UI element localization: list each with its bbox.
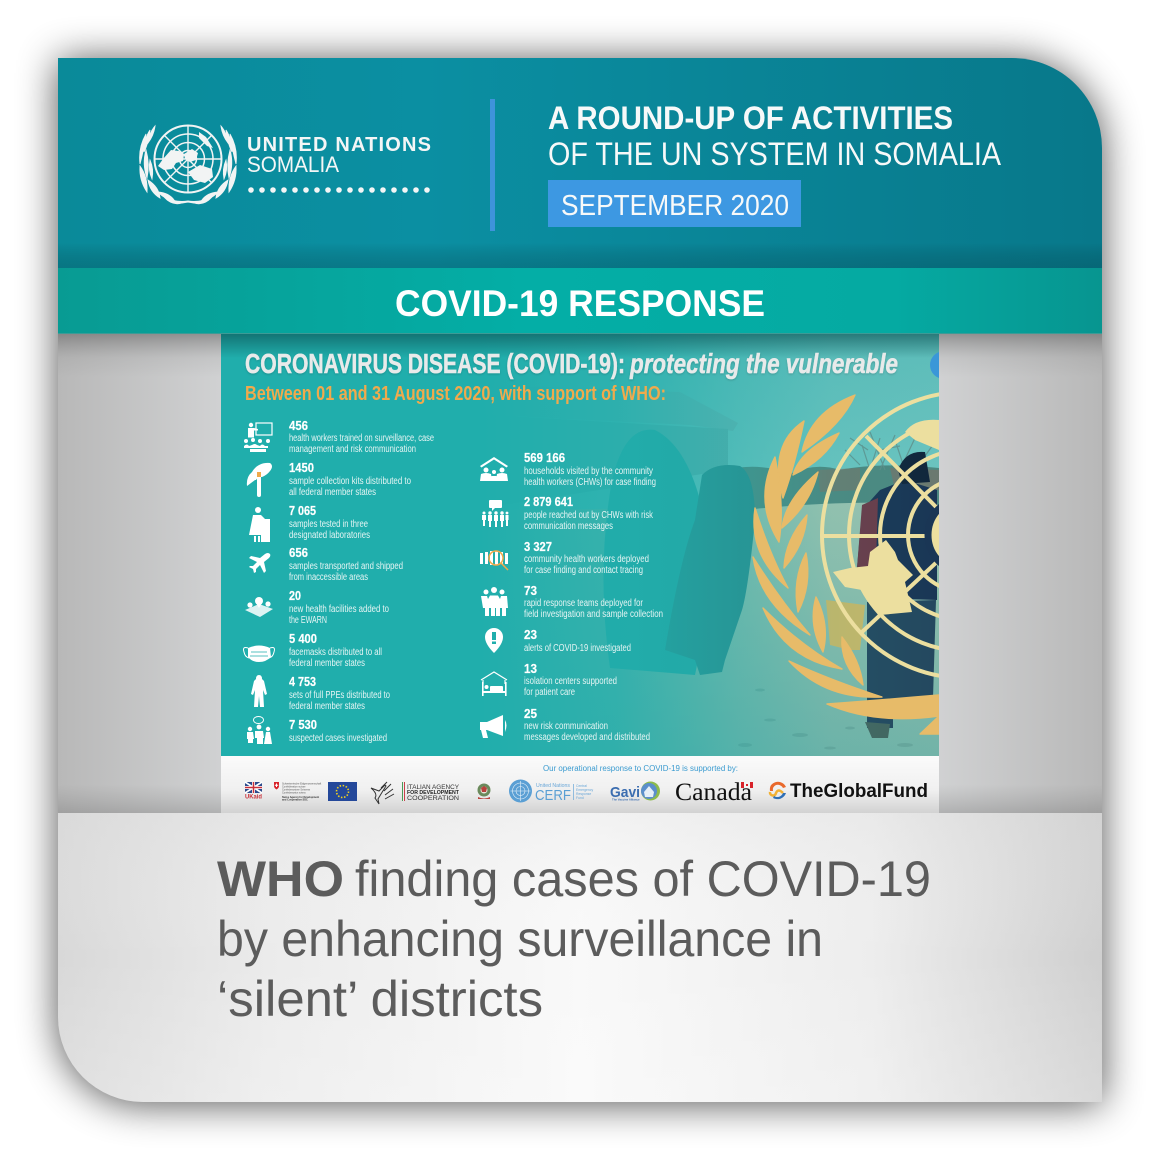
stat: 3 327: for case finding and contact tracing [524, 565, 643, 576]
stat: 4 753: sets of full PPEs distributed to [289, 690, 390, 701]
logo: Italian Agency: COOPERATION [407, 795, 459, 802]
panel: grey surround [58, 334, 1102, 813]
stat: 3 327 [480, 540, 649, 576]
stat: 456: management and risk communication [289, 444, 416, 455]
man in WHO vest [857, 452, 937, 738]
stat: 569 166: health workers (CHWs) for case finding [524, 477, 656, 488]
logo: CERF: Emergency [576, 788, 593, 792]
logo: Swiss cooperation: Swiss Agency for Development [282, 796, 319, 799]
small UN logo top right [930, 352, 939, 378]
vertical divider [490, 99, 495, 231]
stats: left column [244, 419, 434, 744]
stat: 23 [485, 628, 631, 654]
stat: 73: 73 [524, 584, 537, 598]
poster title: protecting the vulnerable [629, 348, 898, 379]
stat: 13: 13 [524, 662, 537, 676]
stat: 2 879 641: 2 879 641 [524, 495, 573, 509]
stat: 13: isolation centers supported [524, 676, 617, 687]
stat: 73: field investigation and sample collection [524, 609, 663, 620]
stat: 569 166 [480, 451, 656, 488]
dotted rule [248, 187, 430, 193]
text: United Nations Somalia: UNITED NATIONS [247, 134, 431, 156]
stat: 1450: 1450 [289, 461, 314, 475]
stat: 73: rapid response teams deployed for [524, 598, 644, 609]
stat: 656 [249, 548, 403, 580]
logo: Swiss cooperation: and Cooperation SDC [282, 798, 308, 802]
logo: EU flag [328, 782, 357, 801]
panel: poster [221, 334, 939, 813]
panel: header [58, 58, 1102, 268]
stat: 13: for patient care [524, 687, 575, 698]
logo: Gavi: Gavi [610, 784, 640, 801]
stat: 5 400: facemasks distributed to all [289, 647, 382, 658]
stat: 7 530 [247, 716, 387, 744]
logo: Italian Agency: ITALIAN AGENCY [407, 784, 460, 791]
logo: UKaid [245, 782, 262, 800]
stat: 13 [481, 662, 617, 698]
logo: CERF: United Nations [536, 783, 571, 789]
logo: CERF: Central [576, 784, 587, 788]
stat: 7 530: suspected cases investigated [289, 733, 387, 744]
jerrycan [826, 600, 865, 650]
stat: 456: health workers trained on surveillance, case [289, 433, 434, 444]
stat: 3 327: community health workers deployed [524, 554, 649, 565]
logo: Swiss cooperation: Schweizerische Eidgenossenschaft [282, 782, 321, 786]
stat: 25: 25 [524, 707, 537, 721]
logo: UKaid: UKaid [245, 794, 262, 800]
stat: 3 327: 3 327 [524, 540, 552, 554]
logo: Italian emblem [478, 784, 490, 799]
heading: round-up [548, 106, 1001, 166]
stat: 1450 [247, 461, 411, 498]
UN globe overlay [820, 392, 939, 678]
ground speckle [738, 688, 913, 750]
logo: Gavi: The Vaccine Alliance [612, 798, 640, 802]
stat: 25: messages developed and distributed [524, 732, 650, 743]
stat: 7 065: samples tested in three [289, 519, 368, 530]
caption text: WHO [217, 851, 344, 907]
logo: Swiss cooperation: Confédération suisse [282, 786, 306, 788]
stat: 7 530: 7 530 [289, 718, 317, 732]
heading: round-up: A ROUND-UP OF ACTIVITIES [548, 100, 953, 136]
heading: round-up: OF THE UN SYSTEM IN SOMALIA [548, 136, 1002, 172]
stat: 656: 656 [289, 546, 308, 560]
wreath leaves [753, 395, 939, 734]
stat: 20: new health facilities added to [289, 604, 389, 615]
hut [730, 422, 737, 430]
stat: 569 166: 569 166 [524, 451, 565, 465]
partner logos strip [221, 756, 939, 813]
logo: Italian Agency: FOR DEVELOPMENT [407, 790, 460, 796]
caption text: ‘silent’ districts [217, 971, 543, 1027]
left fade overlay [221, 334, 865, 756]
stat: 2 879 641 [482, 495, 654, 532]
sparse tree [845, 432, 935, 470]
stat: 4 753: 4 753 [289, 675, 316, 689]
stat: 1450: sample collection kits distributed to [289, 476, 411, 487]
stat: 20: 20 [289, 589, 301, 603]
stat: 20 [245, 590, 389, 623]
logo: CERF [509, 780, 593, 804]
poster title: CORONAVIRUS DISEASE (COVID-19): [245, 348, 625, 379]
text: United Nations Somalia [248, 137, 430, 172]
text: United Nations Somalia: SOMALIA [247, 152, 339, 177]
supporter line: Our operational response to COVID-19 is supported by: [543, 764, 738, 773]
logo: Canada wordmark: Canada [675, 779, 752, 806]
globe centre disc [924, 504, 939, 566]
stat: 20: the EWARN [289, 615, 327, 626]
stat: 656: from inaccessible areas [289, 572, 368, 583]
stat: 25: new risk communication [524, 721, 608, 732]
logo: Swiss cooperation: Confederaziun svizra [282, 792, 306, 794]
logo: The Global Fund: TheGlobalFund [790, 781, 928, 802]
stat: 2 879 641: communication messages [524, 521, 613, 532]
globe land mass [833, 540, 913, 615]
caption text: by enhancing surveillance in [217, 911, 823, 967]
stat: 456 [244, 419, 434, 455]
logo: Swiss cooperation [274, 782, 321, 802]
stat: 7 065 [249, 504, 370, 542]
stat: 569 166: households visited by the community [524, 466, 653, 477]
logo: Swiss cooperation: Confederazione Svizzera [282, 788, 311, 792]
stat: 4 753: federal member states [289, 701, 365, 712]
icon: UN emblem [140, 125, 236, 204]
stat: 1450: all federal member states [289, 487, 376, 498]
stat: 7 065: designated laboratories [289, 530, 370, 541]
caption text: finding cases of COVID-19 [355, 851, 931, 907]
panel: section band [58, 268, 1102, 334]
stat: 2 879 641: people reached out by CHWs with risk [524, 510, 654, 521]
panel: caption background [58, 813, 1102, 1102]
panel: section band: COVID-19 RESPONSE [395, 283, 765, 324]
stat: 23: alerts of COVID-19 investigated [524, 643, 631, 654]
stat: 456: 456 [289, 419, 308, 433]
logo: Gavi [610, 782, 660, 802]
veiled figures [603, 430, 705, 675]
stat: 23: 23 [524, 628, 537, 642]
bushes [742, 465, 939, 509]
date badge: SEPTEMBER 2020 [561, 190, 789, 222]
stat: 5 400 [243, 634, 382, 666]
stat: 5 400: federal member states [289, 658, 365, 669]
stat: 5 400: 5 400 [289, 632, 317, 646]
stat: 25 [480, 707, 650, 743]
logo: CERF: Response [576, 792, 591, 796]
poster subtitle: Between 01 and 31 August 2020, with support of WHO: [245, 383, 666, 405]
logo: Italian Agency [371, 782, 460, 804]
stats: right column [480, 451, 663, 743]
stat: 7 065: 7 065 [289, 504, 316, 518]
stat: 73 [481, 584, 663, 620]
logo: CERF: CERF [535, 787, 571, 804]
stat: 4 753 [251, 675, 390, 712]
stat: 656: samples transported and shipped [289, 561, 403, 572]
date badge [548, 180, 801, 227]
caption text [217, 851, 931, 1027]
logo: CERF: Fund [576, 796, 584, 800]
poster photo background [221, 334, 939, 756]
